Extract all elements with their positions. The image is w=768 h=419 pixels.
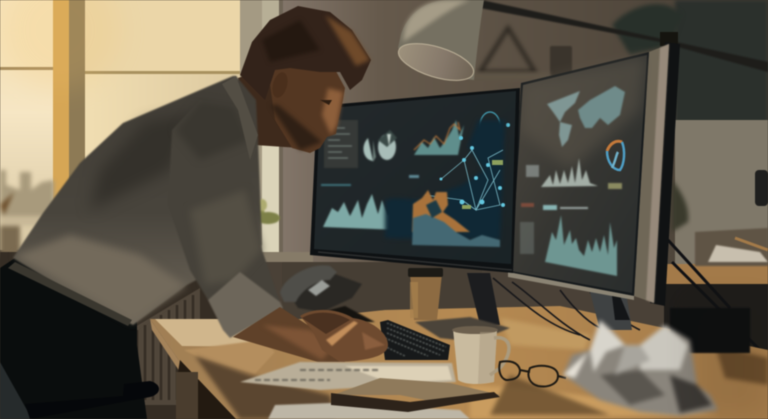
area chart left — [321, 184, 400, 230]
desk — [150, 306, 768, 419]
monitor stands — [415, 273, 750, 353]
pie charts — [363, 130, 397, 162]
potted plant — [238, 199, 280, 252]
glasses — [499, 361, 566, 387]
ear — [270, 71, 290, 99]
monitor screen — [508, 52, 649, 300]
orange map chart — [409, 175, 500, 247]
hair — [240, 6, 371, 100]
donut gauge — [607, 141, 624, 170]
head — [268, 60, 345, 153]
lower wall, window sill and radiator — [0, 252, 482, 419]
screen edge gleam — [318, 252, 512, 270]
forearm — [233, 307, 345, 362]
table lamp — [394, 0, 768, 88]
network graph — [385, 120, 505, 240]
right monitor — [508, 42, 680, 306]
paper under hand — [240, 362, 456, 390]
notebook — [331, 378, 500, 412]
takeaway coffee cup — [408, 268, 443, 320]
monitor side bezel — [634, 42, 680, 306]
crumpled paper — [563, 320, 718, 416]
distant skyline — [0, 170, 54, 256]
large chart on right monitor — [520, 203, 617, 276]
shelf with books, right — [664, 228, 768, 364]
office chair — [0, 362, 159, 419]
keyboard — [380, 320, 450, 360]
world map — [547, 86, 625, 147]
data table panel — [324, 120, 358, 168]
collar — [222, 76, 258, 160]
trousers — [0, 258, 147, 419]
monitor frame and screen — [310, 88, 520, 273]
desk items behind the monitors: cables — [493, 278, 640, 340]
shirt body and sleeve — [13, 76, 283, 338]
belt — [8, 262, 132, 326]
area line chart — [414, 120, 464, 155]
right wall decoration — [470, 0, 768, 268]
man — [0, 6, 388, 419]
left monitor — [310, 88, 520, 273]
neck — [238, 64, 300, 148]
coffee mug — [452, 326, 509, 384]
lower paper sheet — [268, 403, 470, 419]
desk phone — [280, 265, 375, 322]
ring widget — [459, 112, 510, 140]
hands — [300, 310, 388, 362]
small chart on right monitor — [526, 158, 622, 189]
